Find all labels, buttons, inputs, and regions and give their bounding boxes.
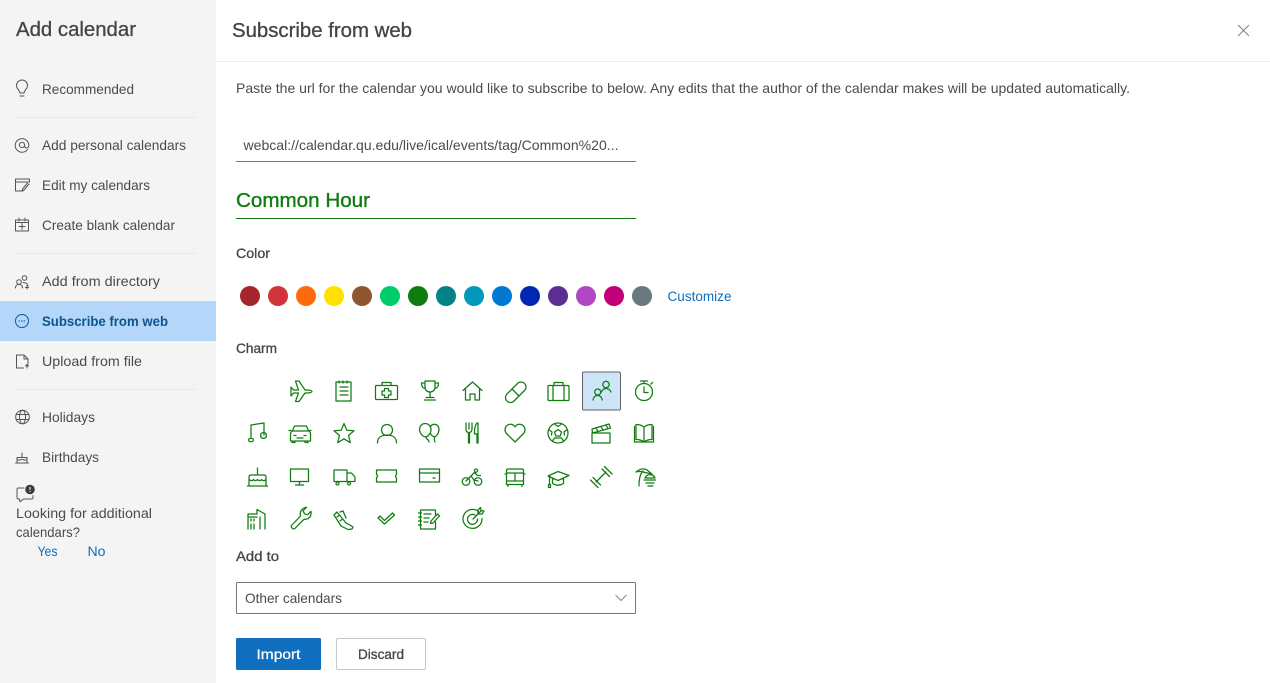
nav item: Birthdays <box>16 449 99 465</box>
nav item: Upload from file: Upload from file <box>42 353 142 369</box>
nav item: Birthdays: Birthdays <box>42 449 99 465</box>
icon: birthday cake <box>248 468 268 486</box>
icon: chevron <box>616 595 626 600</box>
icon: heart <box>505 424 525 442</box>
nav item: Recommended: Recommended <box>42 81 134 97</box>
calendar name input: Common Hour <box>236 190 370 212</box>
icon: trophy <box>422 381 438 400</box>
url input: webcal://calendar.qu.edu/live/ical/events/tag/Common%20... <box>242 137 619 153</box>
icon: music <box>248 423 266 442</box>
icon: credit card <box>420 469 440 482</box>
nav item: Add personal calendars: Add personal calendars <box>42 137 186 153</box>
heading: Color: Color <box>236 245 270 261</box>
button: Import <box>236 638 321 670</box>
icon: home <box>463 382 482 400</box>
sidebar heading: Add calendar <box>16 19 136 41</box>
icon: ticket <box>376 470 396 482</box>
icon: person <box>382 424 392 436</box>
calendar dropdown: Other calendars <box>245 590 342 606</box>
selected charm highlight <box>582 372 620 410</box>
button: Discard: Discard <box>358 646 404 662</box>
instruction text: Paste the url for the calendar you would like to subscribe to below. Any edits that the author of the calendar makes will be updated automatically. <box>236 80 1130 96</box>
icon: running shoe <box>334 511 353 530</box>
heading: Charm: Charm <box>236 340 277 356</box>
charm grid <box>248 381 656 530</box>
heading: Add to: Add to <box>236 548 279 564</box>
icon: wrench <box>291 507 311 529</box>
icon: briefcase <box>548 382 569 400</box>
icon: airplane <box>291 381 312 402</box>
panel header <box>216 20 1270 62</box>
icon: notebook with pen <box>418 510 440 529</box>
icon: bandage <box>505 382 526 403</box>
icon: palm and beach <box>636 469 656 486</box>
icon: target <box>463 508 484 528</box>
nav item: Holidays: Holidays <box>42 409 95 425</box>
link: Customize: Customize <box>668 288 732 304</box>
dialog title: Subscribe from web <box>232 20 412 42</box>
color swatches <box>240 286 652 306</box>
icon: star <box>334 424 354 443</box>
button: Import: Import <box>256 646 301 662</box>
selected nav highlight <box>0 301 216 341</box>
icon: bus <box>505 469 525 486</box>
link: Yes: Yes <box>38 543 58 559</box>
icon: feedback bubble <box>17 485 35 502</box>
icon: soccer ball <box>548 423 568 443</box>
nav item: Subscribe from web: Subscribe from web <box>42 313 168 329</box>
nav item: Holidays <box>16 409 95 425</box>
icon: cutlery <box>466 423 478 443</box>
icon: timer <box>636 384 652 400</box>
icon: bicycle <box>462 478 470 485</box>
calendar dropdown <box>236 582 636 614</box>
icon: close <box>1238 25 1249 36</box>
icon: dumbbell <box>590 466 612 488</box>
icon: book <box>634 424 654 442</box>
icon: clapperboard <box>592 424 610 443</box>
nav item: Edit my calendars: Edit my calendars <box>42 177 150 193</box>
icon: car <box>289 426 311 442</box>
link: No: No <box>88 543 106 559</box>
feedback prompt <box>16 485 152 559</box>
icon: people <box>593 381 611 400</box>
icon: graduation cap <box>548 472 569 488</box>
icon: office building <box>248 510 265 529</box>
icon: notepad <box>336 381 351 401</box>
nav item: Create blank calendar: Create blank calendar <box>42 217 175 233</box>
panel: sidebar <box>0 0 216 683</box>
feedback prompt: calendars? <box>16 524 80 540</box>
nav item: Add from directory: Add from directory <box>42 273 160 289</box>
feedback prompt: Looking for additional <box>16 505 152 521</box>
icon: monitor <box>290 469 308 485</box>
icon: truck <box>334 470 355 485</box>
button: Discard <box>336 638 426 670</box>
icon: check mark <box>378 513 394 524</box>
icon: balloons <box>420 424 439 442</box>
icon: medical kit <box>376 382 398 400</box>
